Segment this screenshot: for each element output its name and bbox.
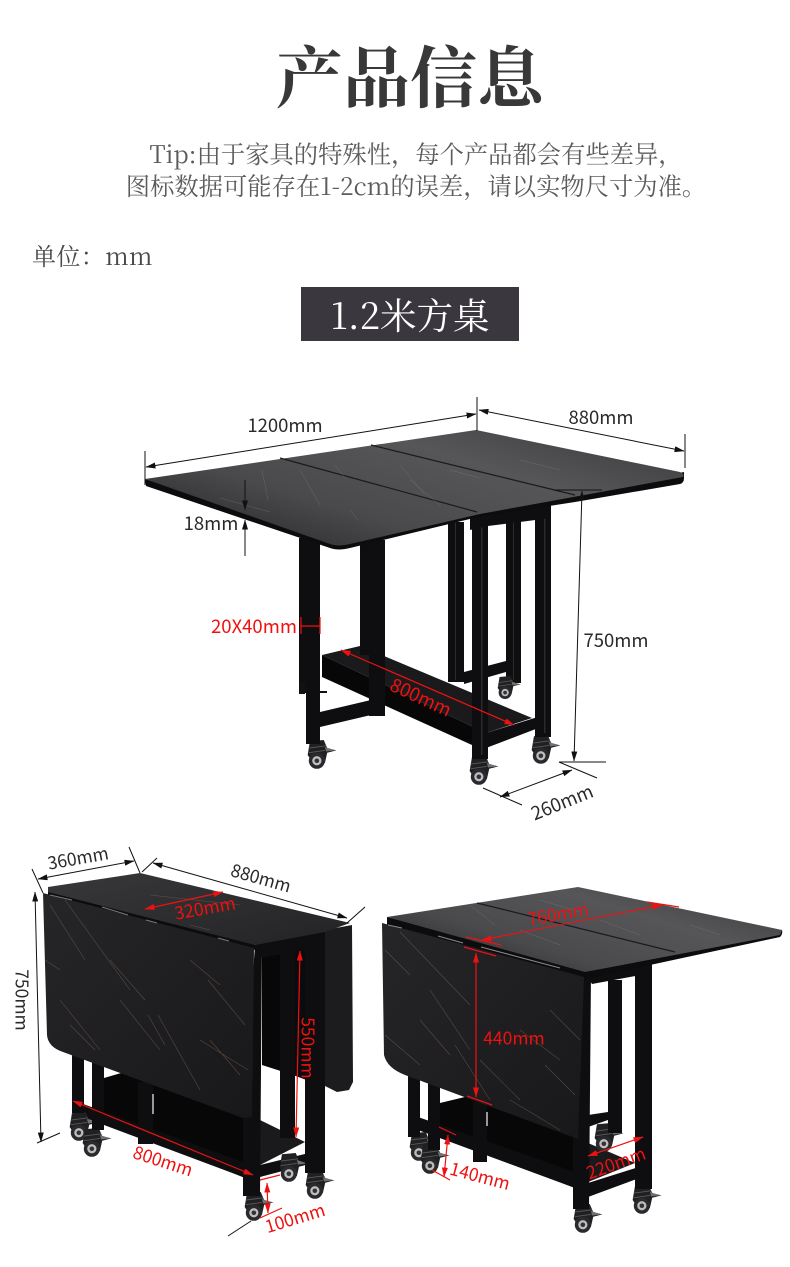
rear legs — [448, 520, 521, 684]
dimension 440mm: 440mm — [483, 1026, 545, 1050]
dimension 550mm: 550mm — [296, 1017, 320, 1079]
size badge: 1.2米方桌 — [330, 288, 490, 340]
unit label: 单位：mm — [32, 237, 153, 272]
dimension 260mm — [483, 762, 597, 826]
dimension 320mm: 320mm — [173, 890, 237, 926]
casters — [410, 1123, 661, 1233]
table top — [145, 430, 684, 550]
legs — [72, 931, 325, 1196]
dimension 260mm: 260mm — [527, 778, 597, 826]
dimension 760mm: 760mm — [526, 896, 590, 932]
lower frame — [418, 1095, 642, 1197]
dimension 18mm — [184, 480, 245, 556]
dimension 550mm — [296, 951, 320, 1137]
dimension 800mm: 800mm — [386, 671, 456, 723]
dimension 100mm — [228, 1175, 328, 1239]
table 1: open table — [145, 397, 685, 826]
casters — [70, 1112, 334, 1221]
dimension 750mm — [10, 892, 60, 1143]
dimension 880mm: 880mm — [568, 404, 634, 430]
table top — [48, 873, 350, 950]
dimension 360mm: 360mm — [46, 840, 110, 876]
dimension 800mm — [73, 1101, 253, 1182]
folded leaf — [43, 893, 254, 1118]
dimension 880mm — [142, 857, 365, 923]
dimension 750mm — [555, 490, 649, 762]
dimension 1200mm — [145, 397, 477, 485]
table 2: folded table — [10, 840, 365, 1239]
casters — [308, 676, 560, 785]
title: 产品信息 — [276, 26, 544, 122]
tip text: Tip:由于家具的特殊性，每个产品都会有些差异， — [149, 135, 683, 170]
dimension 140mm: 140mm — [447, 1156, 513, 1196]
table top — [387, 887, 782, 979]
dimension 880mm — [479, 404, 685, 468]
dimension 440mm — [464, 947, 545, 1105]
dimension 800mm: 800mm — [130, 1140, 196, 1182]
dimension 750mm: 750mm — [583, 627, 649, 653]
dimension 880mm: 880mm — [228, 857, 294, 899]
dimension 140mm — [432, 1127, 513, 1196]
back leaf and panels — [262, 925, 353, 1092]
lower frame — [72, 1068, 313, 1178]
dimension 760mm — [466, 896, 679, 945]
dimension 20X40mm: 20X40mm — [211, 613, 297, 639]
dimension 100mm: 100mm — [262, 1197, 328, 1239]
tip text: 图标数据可能存在1-2cm的误差，请以实物尺寸为准。 — [126, 167, 706, 202]
legs — [408, 963, 652, 1209]
dimension 360mm — [32, 840, 140, 893]
dimension 1200mm: 1200mm — [247, 412, 323, 438]
dimension 18mm: 18mm — [184, 510, 238, 536]
lower shelf — [320, 646, 541, 748]
tip text — [126, 135, 706, 202]
folded leaf — [382, 923, 584, 1139]
table 3: half-open table — [382, 887, 782, 1233]
dimension 750mm: 750mm — [10, 969, 34, 1031]
dimension 800mm — [341, 650, 514, 725]
dimension 220mm: 220mm — [583, 1141, 649, 1185]
front legs — [299, 505, 551, 759]
